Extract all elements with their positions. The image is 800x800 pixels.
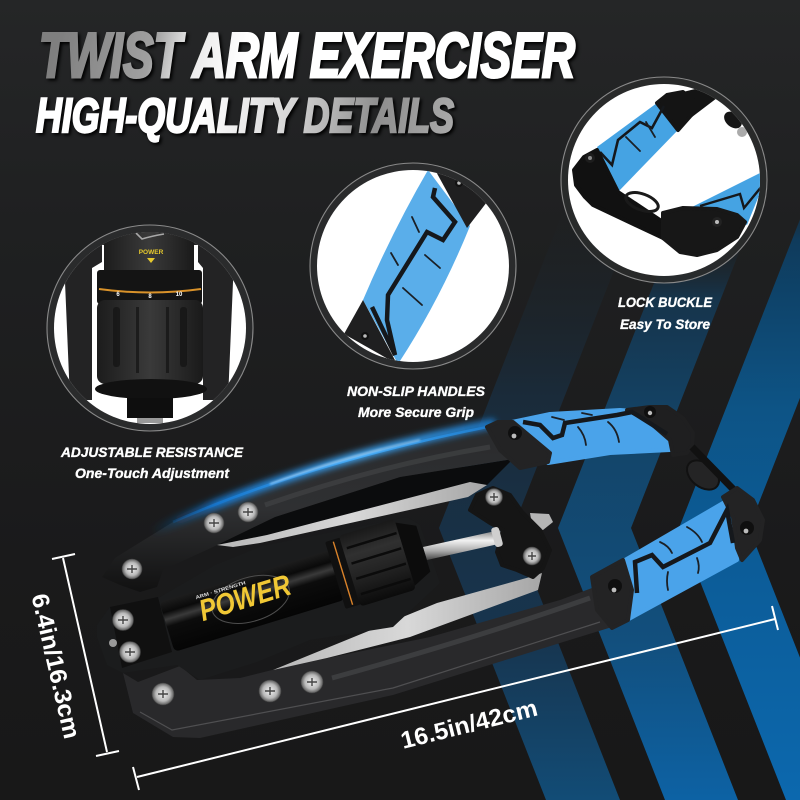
dial ring: 6 (116, 292, 120, 298)
gap shadow (217, 459, 513, 545)
frame bars (65, 232, 234, 400)
base and stem (95, 379, 207, 423)
upper handle (597, 103, 678, 192)
dimension: width line (133, 606, 778, 790)
subtitle: HIGH-QUALITY DETAILS (36, 90, 454, 143)
lower handle (692, 173, 760, 225)
lock buckle (572, 148, 662, 240)
label: lock buckle: LOCK BUCKLE (618, 294, 713, 310)
handle grip (363, 170, 470, 364)
panel: adjustable resistance circle (47, 215, 253, 431)
label: adjustable resistance: One-Touch Adjustment (75, 465, 230, 481)
panel: lock buckle circle (561, 77, 767, 283)
cylinder: POWER (195, 569, 295, 628)
screws (112, 488, 541, 705)
screw crosses (118, 493, 536, 698)
upper arm highlight (265, 447, 490, 505)
product: arm exerciser (97, 406, 763, 738)
dial ring (97, 270, 202, 304)
power cylinder (104, 232, 194, 272)
power cylinder: POWER (139, 249, 164, 256)
dial ring: 8 (148, 294, 152, 300)
stem and bolt (685, 89, 716, 117)
small rivet (109, 639, 117, 647)
label: adjustable resistance: ADJUSTABLE RESISTANCE (60, 444, 244, 460)
clamp plate (470, 488, 553, 577)
lower arm (123, 585, 612, 738)
panel: non-slip handles circle (310, 163, 516, 369)
silver blades (217, 482, 487, 547)
rod (423, 530, 503, 560)
label: non-slip handles: More Secure Grip (358, 404, 474, 420)
dimension: width label: 16.5in/42cm (398, 695, 540, 755)
label: non-slip handles (347, 383, 486, 420)
upper arm (102, 427, 525, 592)
dial ring: 10 (176, 292, 183, 298)
title: TWIST ARM EXERCISER (39, 21, 575, 91)
label: adjustable resistance (60, 444, 244, 481)
cylinder (156, 513, 434, 662)
label: lock buckle (618, 294, 713, 332)
blue light streak (150, 423, 495, 533)
lower handle (592, 488, 763, 628)
adjustment knob (97, 300, 203, 384)
label: non-slip handles: NON-SLIP HANDLES (347, 383, 486, 399)
central plate (97, 517, 440, 680)
upper handle (487, 406, 693, 468)
cylinder: ARM · STRENGTH (195, 580, 247, 601)
dimension: height label: 6.4in/16.3cm (26, 591, 85, 741)
label: lock buckle: Easy To Store (620, 316, 710, 332)
lock link (681, 447, 734, 496)
dimension: height line (52, 554, 119, 756)
